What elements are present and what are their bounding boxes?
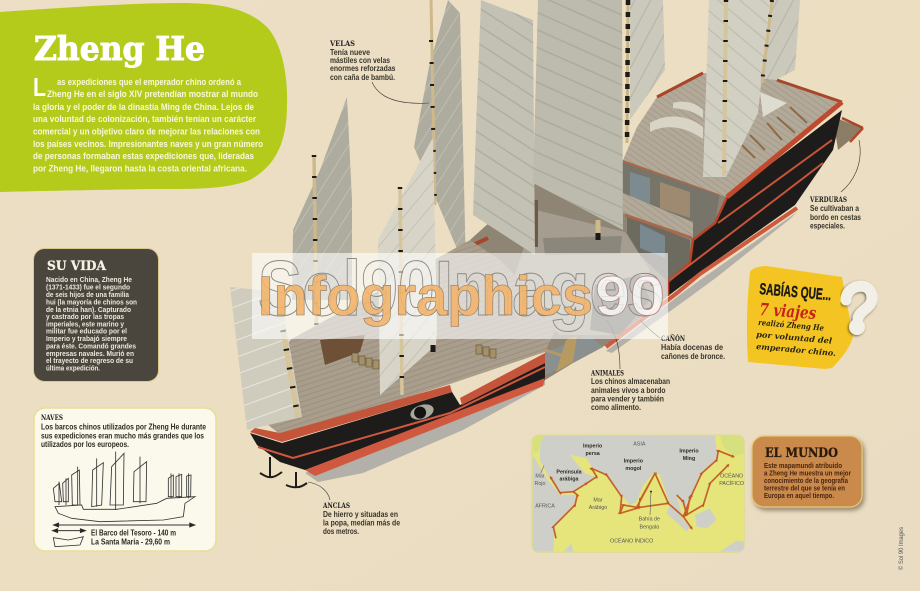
map: voyages of Zheng He — [532, 435, 744, 552]
mid decks and cabins — [623, 160, 720, 282]
el mundo text: terrestre del que se tenía en — [764, 486, 845, 492]
intro text: Zheng He en el siglo XIV pretendían mostrar al mundo — [47, 89, 258, 99]
el mundo text — [764, 463, 851, 500]
map labels: arábiga — [560, 477, 579, 483]
stern hull — [606, 102, 842, 353]
stern deck — [623, 73, 863, 197]
intro text: L — [33, 72, 46, 102]
su vida text: el trayecto de regreso de su — [46, 358, 133, 365]
callout: sabías que: SABÍAS QUE... — [759, 279, 832, 304]
map labels — [535, 442, 744, 544]
map labels: Imperio — [679, 449, 699, 455]
map labels: ÁFRICA — [535, 502, 555, 509]
map labels: OCÉANO ÍNDICO — [610, 537, 653, 544]
panel: su vida — [34, 248, 158, 382]
su vida text: última expedición. — [46, 366, 100, 372]
map labels: mogol — [625, 466, 642, 472]
map labels: Península — [556, 469, 582, 475]
su vida text: para éste. Comandó grandes — [46, 344, 136, 350]
callout: sabías que: emperador chino. — [756, 341, 837, 358]
label: velas — [329, 39, 429, 103]
front sails and masts — [230, 0, 772, 430]
diagram: ship comparison — [52, 452, 195, 547]
heading: su vida: SU VIDA — [47, 259, 107, 274]
su vida text: imperiales, este marino y — [46, 322, 124, 328]
map labels: Mar — [535, 474, 545, 480]
su vida text: Nacido en China, Zheng He — [46, 277, 132, 284]
label: animales: animales vivos a bordo — [591, 386, 666, 395]
label: animales: Los chinos almacenaban — [591, 377, 670, 386]
land — [533, 436, 744, 552]
panel: el mundo — [752, 436, 862, 507]
map labels: OCÉANO — [720, 473, 743, 480]
intro text — [33, 72, 263, 174]
label: animales: ANIMALES — [590, 368, 624, 378]
callout: sabías que — [747, 266, 872, 369]
credit: © Sol 90 Images — [898, 527, 905, 570]
watermark: Infographics — [258, 264, 593, 327]
map labels: Rojo — [535, 481, 546, 487]
label: velas: mástiles con velas — [330, 56, 390, 65]
label: anclas — [308, 482, 400, 536]
label: velas: Tenía nueve — [330, 48, 370, 57]
label: anclas: dos metros. — [323, 527, 359, 536]
label: cañón: cañones de bronce. — [661, 352, 725, 361]
intro text: por Zheng He, llegaron hasta la costa oriental africana. — [33, 164, 247, 174]
label: velas: con caña de bambú. — [330, 73, 395, 82]
el mundo text: a Zheng He muestra un mejor — [764, 470, 851, 478]
su vida text: y castrado por las tropas — [46, 314, 124, 321]
label: anclas: la popa, medían más de — [323, 518, 400, 528]
central deck and hold — [470, 160, 727, 380]
label: animales: para vender y también — [591, 394, 664, 404]
intro text: as expediciones que el emperador chino ordenó a — [57, 77, 242, 87]
scale labels — [91, 528, 176, 546]
watermark: 90 — [595, 264, 665, 327]
anchors — [260, 457, 307, 487]
naves text: sus expediciones eran mucho más grandes que los — [41, 432, 204, 440]
forward deck — [262, 240, 560, 436]
intro text: de personas formaban estas expediciones que, lideradas — [33, 151, 254, 161]
label: anclas: ANCLAS — [322, 501, 350, 510]
map labels: Bahía de — [639, 517, 660, 523]
panel: naves — [34, 408, 216, 551]
title: Zheng He — [34, 29, 205, 68]
su vida text: de la etnia han). Capturado — [46, 307, 131, 314]
label: verduras: bordo en cestas — [810, 213, 861, 222]
map labels: persa — [586, 451, 600, 457]
label: velas: enormes reforzadas — [330, 64, 396, 73]
map labels: Mar — [593, 498, 603, 504]
map labels: Bengala — [640, 524, 659, 530]
icon: question mark — [846, 286, 872, 335]
callout: sabías que: realizó Zheng He — [758, 317, 824, 333]
label: verduras: Se cultivaban a — [810, 204, 859, 213]
map labels: Imperio — [583, 444, 603, 450]
heading: el mundo: EL MUNDO — [765, 446, 838, 461]
su vida text: Imperio y trabajó siempre — [46, 336, 127, 343]
el mundo text: conocimiento de la geografía — [764, 478, 848, 485]
panel: intro — [0, 3, 287, 192]
intro text: una voluntad de colonización, también tenían un carácter — [33, 114, 256, 124]
label: verduras — [809, 140, 861, 230]
intro text: la gloria y el poder de la dinastía Ming de China. Lejos de — [33, 102, 254, 112]
map labels: Arábigo — [589, 505, 607, 511]
label: velas: VELAS — [329, 39, 355, 48]
su vida text — [46, 277, 137, 372]
label: verduras: especiales. — [810, 222, 845, 230]
naves text: Los barcos chinos utilizados por Zheng He durante — [41, 422, 206, 432]
su vida text: hui (la mayoría de chinos son — [46, 300, 137, 306]
hull eye — [408, 402, 436, 422]
su vida text: de seis hijos de una familia — [46, 292, 129, 299]
illustration: Chinese treasure ship — [230, 0, 863, 487]
label: animales — [590, 320, 670, 412]
callout: sabías que: por voluntad del — [756, 329, 832, 346]
map labels: ASIA — [633, 442, 646, 448]
routes — [551, 451, 733, 538]
naves text: utilizados por los europeos. — [41, 440, 129, 449]
map labels: Imperio — [624, 458, 644, 464]
intro text: comercial y un objetivo claro de mejorar las relaciones con — [33, 126, 260, 136]
label: cañón: Había docenas de — [661, 343, 723, 352]
label: cañón: CAÑÓN — [661, 334, 685, 343]
label: cañón — [640, 320, 725, 361]
barrels — [352, 345, 496, 369]
el mundo text: Este mapamundi atribuido — [764, 463, 842, 470]
su vida text: empresas navales. Murió en — [46, 351, 134, 358]
su vida text: militar fue educado por el — [46, 328, 127, 336]
map labels: PACÍFICO — [719, 480, 744, 487]
watermark: Sol90Images — [258, 244, 663, 332]
label: animales: como alimento. — [591, 403, 641, 412]
label: verduras: VERDURAS — [809, 195, 847, 204]
map labels: Ming — [683, 456, 695, 462]
heading: naves: NAVES — [41, 413, 63, 422]
rear sails — [292, 0, 800, 363]
bow hull — [250, 353, 545, 482]
intro text: los países vecinos. Impresionantes naves y un gran número — [33, 139, 263, 149]
su vida text: (1371-1433) fue el segundo — [46, 284, 130, 292]
naves text — [41, 422, 206, 449]
callout: sabías que: 7 viajes — [759, 300, 817, 324]
scale labels: La Santa María - 29,60 m — [91, 536, 170, 546]
el mundo text: Europa en aquel tiempo. — [764, 493, 834, 500]
scale labels: El Barco del Tesoro - 140 m — [91, 528, 176, 538]
label: anclas: De hierro y situadas en — [323, 510, 398, 519]
